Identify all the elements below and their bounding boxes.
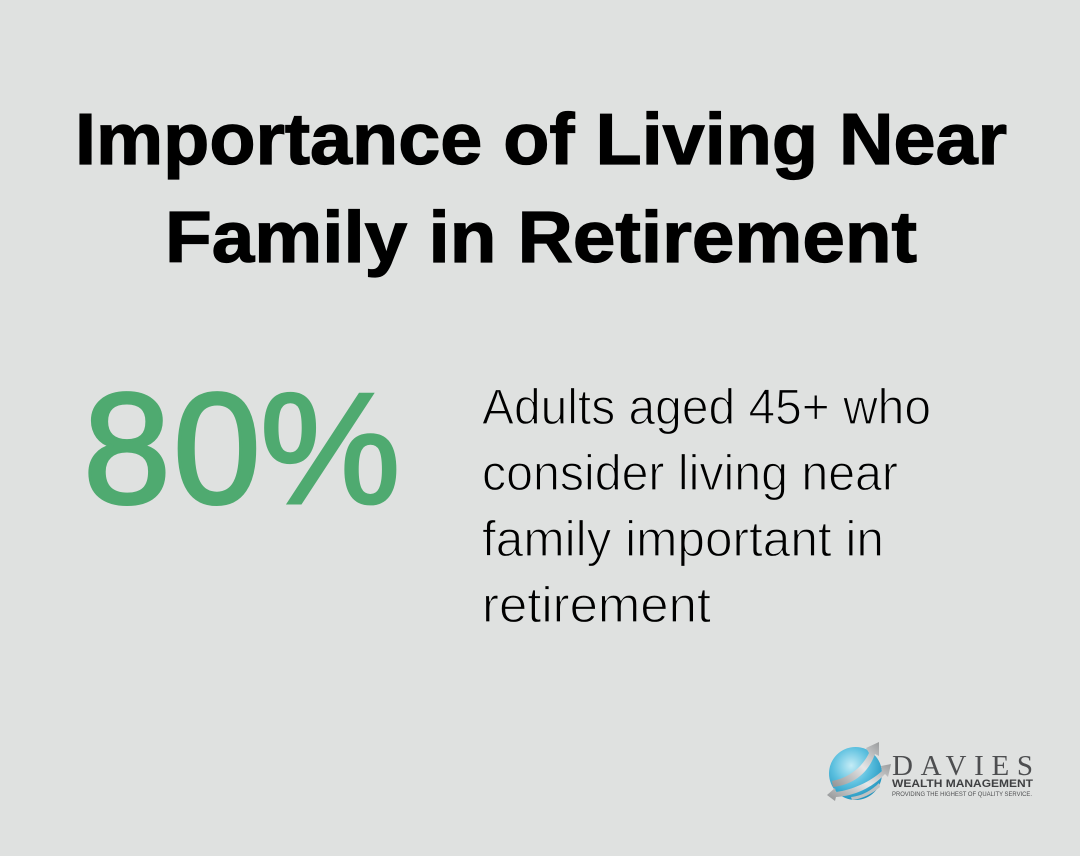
logo: Davies Wealth Management [827, 742, 1033, 801]
title: Importance of Living Near [75, 100, 1007, 180]
statistic description: Adults aged 45+ who [482, 379, 931, 435]
statistic description: family important in [482, 511, 884, 567]
title [75, 100, 1007, 278]
wordmark subtitle: WEALTH MANAGEMENT [892, 778, 1033, 790]
icon: globe with arrows [827, 742, 891, 801]
statistic description: consider living near [482, 445, 898, 501]
title: Family in Retirement [165, 198, 917, 278]
tagline: PROVIDING THE HIGHEST OF QUALITY SERVICE. [892, 791, 1032, 798]
statistic description [482, 379, 931, 633]
statistic description: retirement [482, 577, 711, 633]
big statistic: 80%: 80% [83, 361, 400, 537]
wordmark: DAVIES [892, 750, 1033, 782]
